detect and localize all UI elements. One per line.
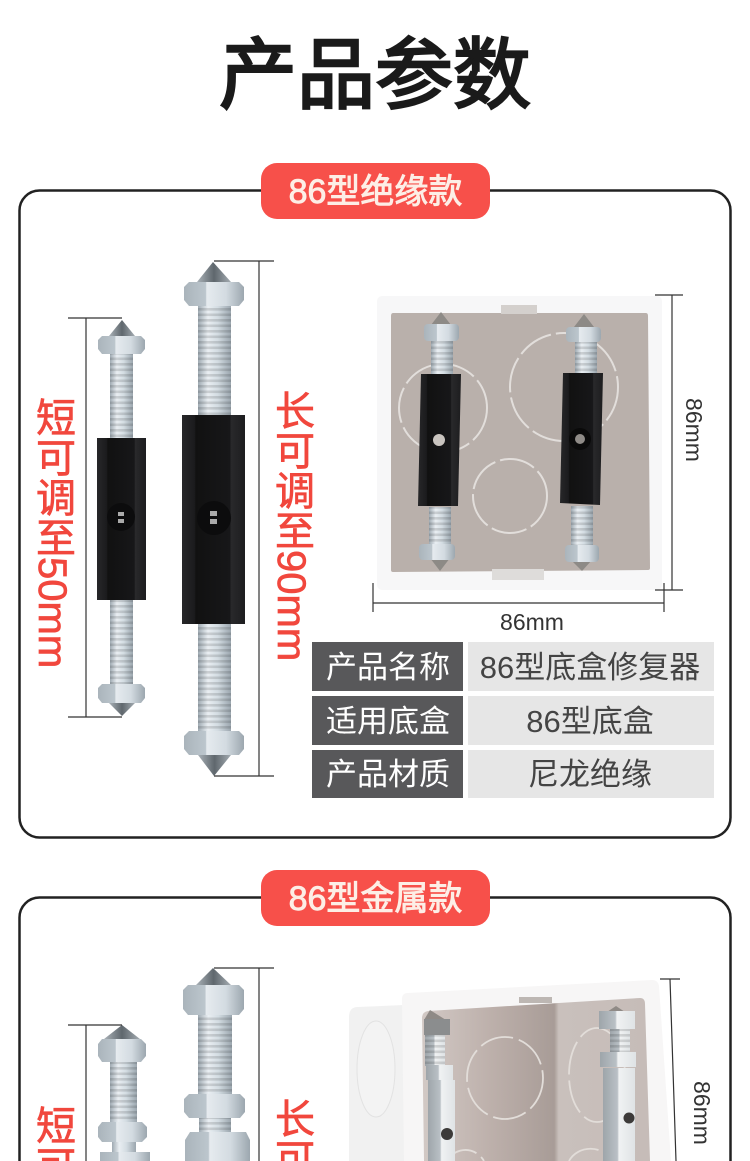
row: product name: 产品名称 (326, 650, 450, 685)
dimension lines for box (373, 295, 683, 612)
badge: 86型绝缘款: 86型绝缘款 (289, 173, 462, 211)
dimension line for metal box (660, 979, 680, 1161)
row: material: 尼龙绝缘 (528, 757, 652, 792)
short bolt, metal (98, 1025, 150, 1161)
title: 产品参数 (219, 31, 531, 119)
row: material (312, 750, 714, 798)
row: material: 产品材质 (326, 757, 450, 792)
left metal repairer (424, 1010, 455, 1161)
photo: metal repairers in box (349, 980, 671, 1161)
long bolt, metal (183, 968, 250, 1161)
badge: 86型金属款: 86型金属款 (289, 880, 462, 918)
label: long length: 长可调至90mm (269, 390, 314, 661)
row: applicable box: 86型底盒 (526, 704, 654, 739)
photo: insulated repairers in box (377, 296, 662, 590)
short bolt, insulated (97, 320, 146, 716)
label: short length: 短可调至50mm (30, 397, 75, 668)
spec table (312, 642, 714, 798)
row: product name (312, 642, 714, 691)
row: applicable box: 适用底盒 (326, 704, 450, 739)
dimension lines for metal bolts (68, 968, 274, 1161)
label: box width: 86mm (500, 609, 564, 635)
badge: 86型绝缘款 (261, 163, 490, 219)
dimension lines for bolts (68, 261, 274, 776)
right metal repairer (599, 1006, 636, 1161)
label: metal box height: 86mm (689, 1081, 715, 1145)
badge: 86型金属款 (261, 870, 490, 926)
right repairer (560, 314, 603, 571)
panel: 86型绝缘款 (20, 163, 730, 838)
left repairer (418, 312, 461, 571)
row: product name: 86型底盒修复器 (480, 650, 700, 685)
panel: 86型金属款 (20, 870, 730, 1161)
label: box height: 86mm (681, 398, 707, 462)
long bolt, insulated (182, 262, 245, 776)
row: applicable box (312, 696, 714, 745)
